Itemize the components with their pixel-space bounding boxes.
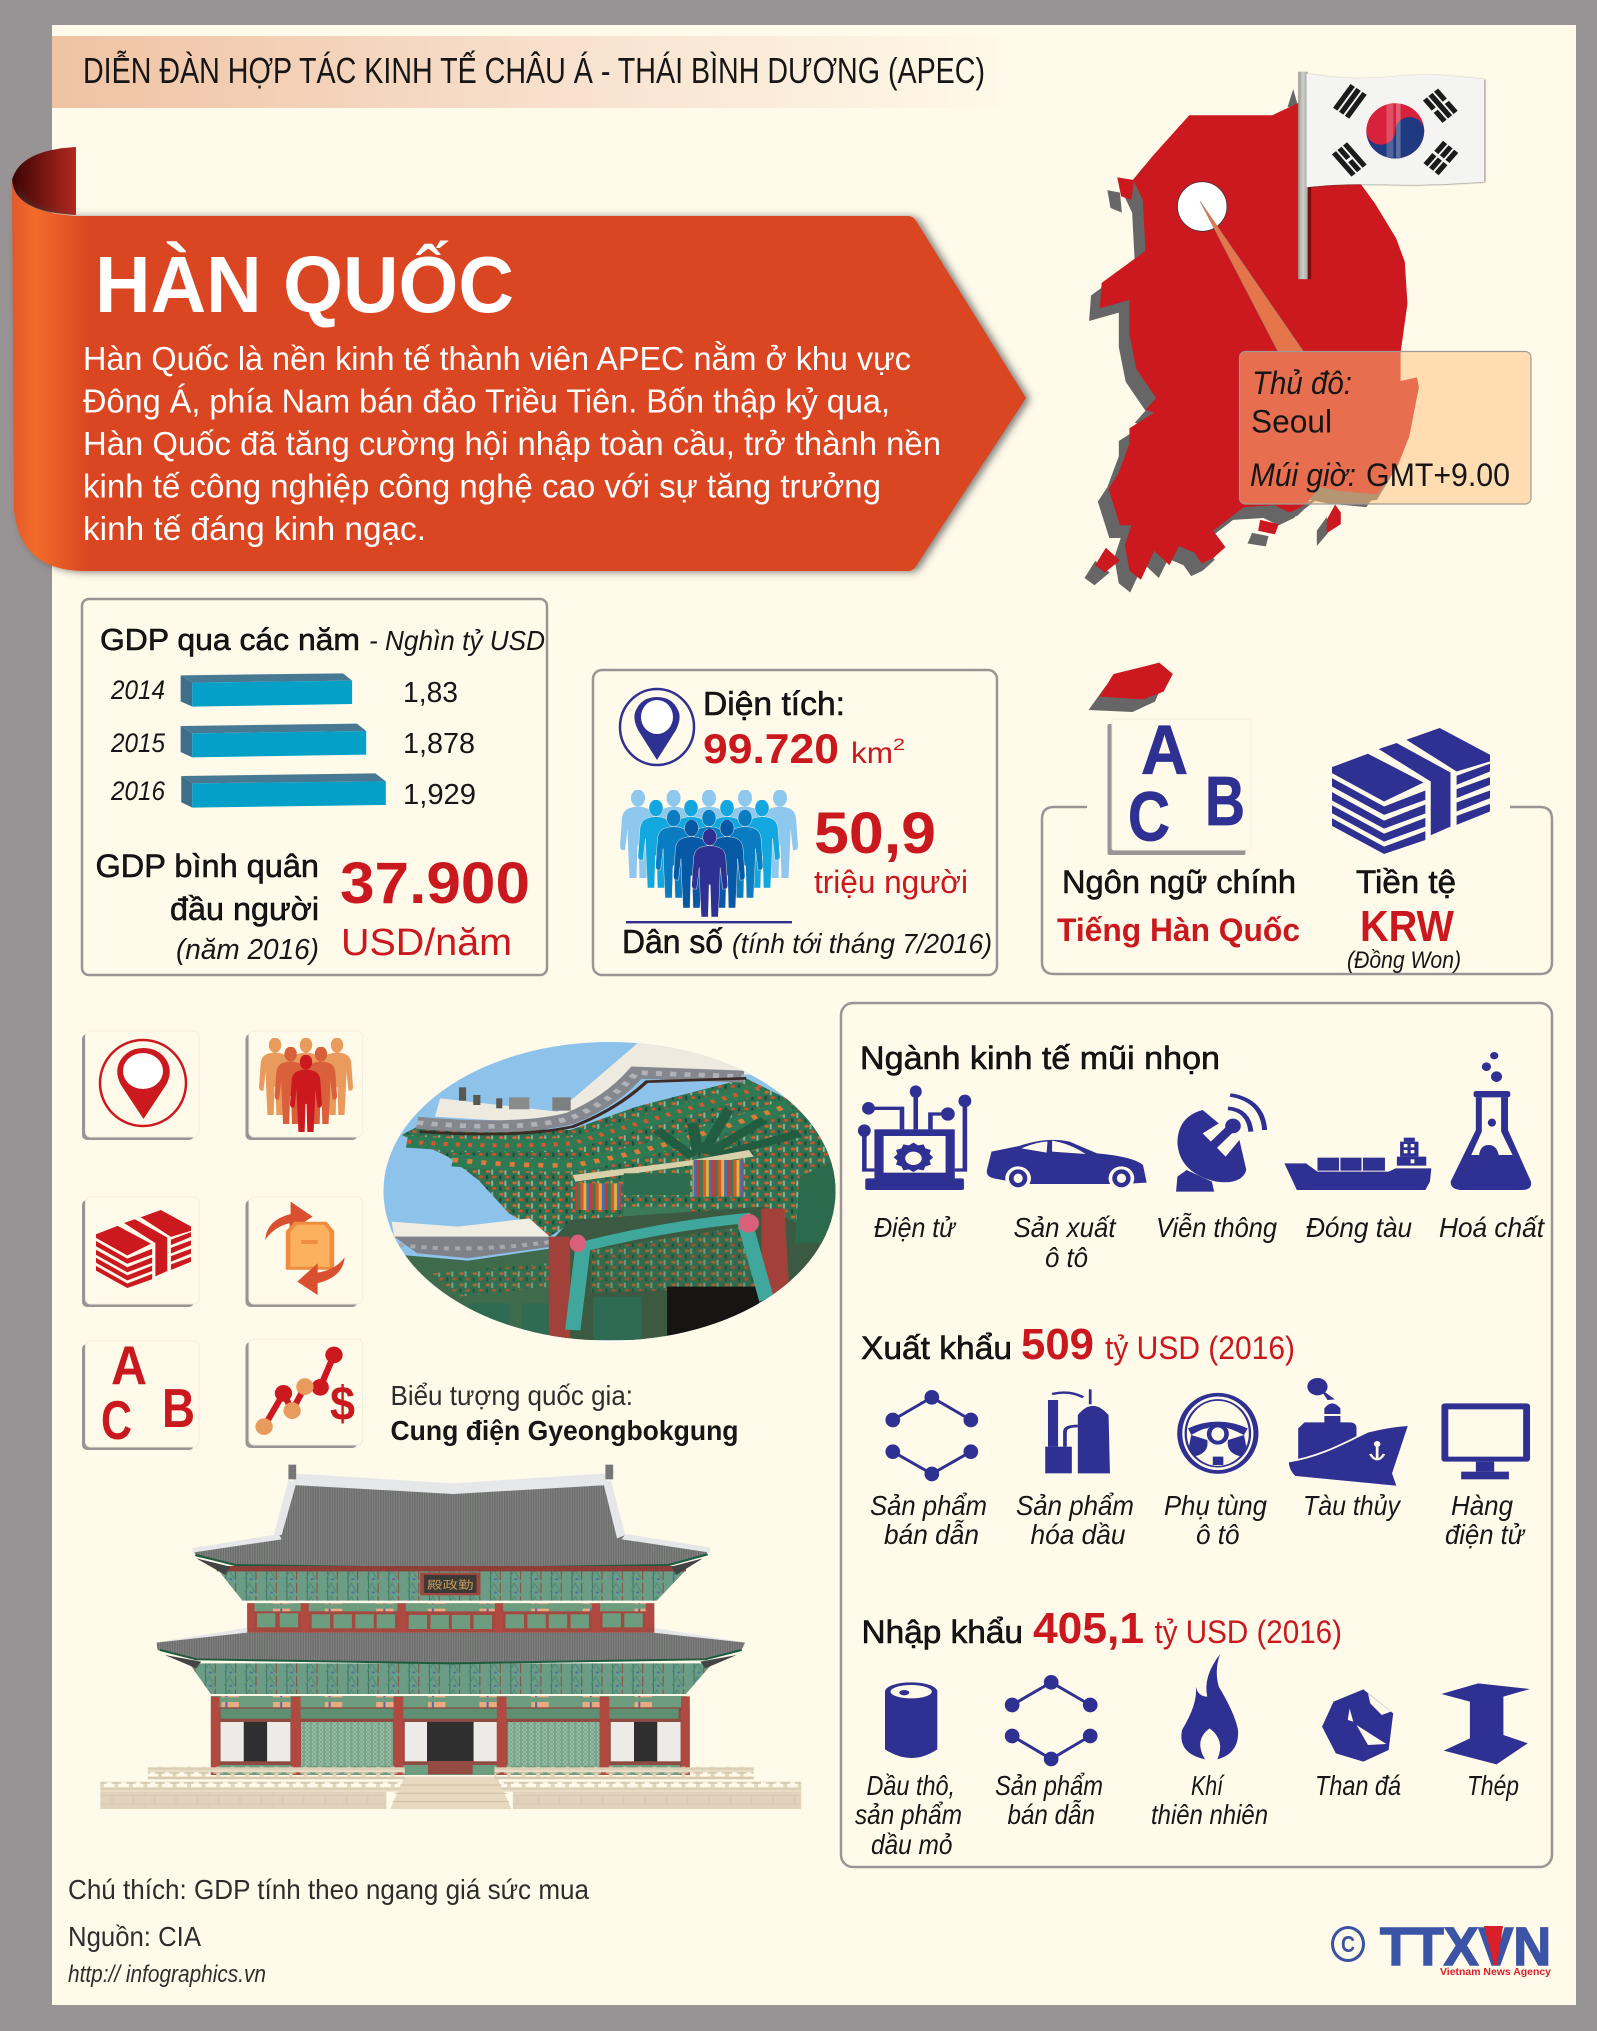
- icon: ABC card: A: [1141, 711, 1188, 789]
- GDP per capita label: [96, 848, 319, 966]
- population label: (tính tới tháng 7/2016): [732, 928, 992, 959]
- icon: oil barrel: [885, 1682, 937, 1758]
- ground floor walls: [211, 1707, 690, 1775]
- GDP per capita label: đầu người: [170, 891, 319, 927]
- currency text: (Đồng Won): [1347, 947, 1461, 974]
- currency text: Tiền tệ: [1356, 864, 1456, 900]
- import icons: [885, 1654, 1530, 1766]
- key sector labels: Sản xuất: [1014, 1212, 1117, 1243]
- export labels: [870, 1490, 1526, 1550]
- icon: petrochemical plant: [1045, 1389, 1110, 1473]
- name plaque: 殿政勤: [427, 1579, 474, 1591]
- lower roof: [157, 1628, 745, 1663]
- stone terrace: [100, 1792, 386, 1809]
- heading: imports: Nhập khẩu: [862, 1614, 1023, 1650]
- GDP per capita value: [340, 851, 530, 964]
- export icons: [885, 1378, 1530, 1487]
- GDP per capita value: 37.900: [340, 851, 530, 916]
- bar chart: GDP by year: 1,83: [403, 677, 458, 709]
- icon: semiconductor: [1005, 1675, 1098, 1766]
- population value: [814, 801, 968, 900]
- icon: semiconductor: [885, 1390, 978, 1481]
- key sector labels: [874, 1212, 1545, 1273]
- header band: [52, 36, 1022, 108]
- GDP per capita value: USD/năm: [341, 922, 512, 964]
- map islands: [1095, 177, 1341, 573]
- card: alphabet: A: [111, 1334, 147, 1396]
- import labels: Dầu thô,: [866, 1770, 955, 1801]
- flag of South Korea: [1298, 72, 1484, 279]
- key sector labels: Đóng tàu: [1306, 1212, 1412, 1243]
- icon: ABC card: C: [1128, 778, 1170, 856]
- icon: monitor: [1441, 1403, 1530, 1479]
- key sector icons: [858, 1052, 1531, 1192]
- bar chart: GDP by year: 2016: [110, 776, 166, 806]
- card: economy trend: $: [330, 1378, 355, 1431]
- icon: ABC card: [1108, 711, 1251, 856]
- photo caption: Biểu tượng quốc gia:: [390, 1380, 633, 1411]
- card: alphabet: B: [162, 1377, 195, 1439]
- icon: crowd of people: [620, 789, 798, 923]
- ribbon banner: [12, 147, 1026, 571]
- icon: car: [987, 1140, 1147, 1190]
- icon: ABC card: B: [1205, 762, 1245, 840]
- bar chart: GDP by year: 1,878: [403, 728, 475, 760]
- key sector labels: Điện tử: [874, 1212, 957, 1243]
- card: money: [82, 1197, 199, 1307]
- balustrades: [148, 1767, 405, 1777]
- icon: banknote stack: [1332, 728, 1490, 854]
- title: forum name: DIỄN ĐÀN HỢP TÁC KINH TẾ CHÂU Á - THÁI BÌNH DƯƠNG (APEC): [83, 49, 985, 91]
- key sector labels: ô tô: [1045, 1242, 1088, 1273]
- icon: coal: [1322, 1689, 1393, 1762]
- export labels: Sản phẩm: [870, 1490, 987, 1521]
- heading: exports: [861, 1320, 1295, 1369]
- map of South Korea with flag: [1085, 72, 1484, 593]
- icon: ship: [1288, 1378, 1409, 1487]
- upper bracket set: [218, 1570, 686, 1601]
- footnote and sources: http:// infographics.vn: [68, 1961, 266, 1988]
- card: alphabet: [82, 1334, 199, 1451]
- import labels: bán dẫn: [1008, 1799, 1095, 1830]
- bar chart: GDP by year: [110, 673, 476, 811]
- language text: Ngôn ngữ chính: [1062, 864, 1296, 900]
- import labels: Khí: [1191, 1770, 1225, 1801]
- GDP heading: - Nghìn tỷ USD: [369, 625, 545, 656]
- icon: steel beam: [1441, 1683, 1530, 1764]
- population label: Dân số: [622, 923, 723, 960]
- heading: imports: [862, 1604, 1342, 1653]
- area text: [703, 685, 905, 772]
- GDP heading: [100, 622, 545, 657]
- card: alphabet: C: [101, 1389, 132, 1451]
- intro paragraph: Đông Á, phía Nam bán đảo Triều Tiên. Bốn thập kỷ qua,: [83, 382, 890, 420]
- icon: gas flame: [1181, 1654, 1238, 1759]
- callout: capital and time zone: Seoul: [1251, 404, 1332, 440]
- icon: steering wheel: [1180, 1395, 1256, 1472]
- import labels: dầu mỏ: [871, 1829, 952, 1860]
- card: people: [246, 1031, 362, 1140]
- name plaque: [420, 1573, 480, 1595]
- population value: triệu người: [814, 864, 968, 900]
- export labels: Hàng: [1451, 1490, 1513, 1521]
- illustration: Geunjeongjeon palace hall: [100, 1465, 801, 1809]
- callout pointer: [1200, 201, 1303, 352]
- upper roof: [192, 1485, 710, 1568]
- icon: cargo ship: [1284, 1138, 1431, 1190]
- export labels: điện tử: [1445, 1519, 1526, 1550]
- GDP per capita label: (năm 2016): [176, 934, 319, 966]
- logo: TTXVN: C: [1341, 1931, 1355, 1957]
- currency text: KRW: [1360, 902, 1454, 951]
- logo: TTXVN: Vietnam News Agency: [1440, 1966, 1551, 1978]
- footnote and sources: [68, 1874, 589, 1988]
- heading: imports: tỷ USD (2016): [1154, 1614, 1342, 1650]
- area text: 2: [893, 735, 905, 754]
- lower bracket set: [189, 1663, 713, 1694]
- card: economy trend: [246, 1339, 362, 1448]
- import labels: Sản phẩm: [995, 1770, 1103, 1801]
- import labels: thiên nhiên: [1151, 1799, 1268, 1830]
- callout: capital and time zone: GMT+9.00: [1366, 457, 1510, 493]
- footnote and sources: Chú thích: GDP tính theo ngang giá sức mua: [68, 1874, 589, 1905]
- heading: imports: 405,1: [1033, 1604, 1144, 1653]
- key sector labels: Hoá chất: [1439, 1212, 1545, 1243]
- export labels: Sản phẩm: [1016, 1490, 1134, 1521]
- population value: 50,9: [814, 801, 936, 866]
- import labels: Thép: [1467, 1770, 1519, 1801]
- import labels: Than đá: [1315, 1770, 1401, 1801]
- callout: capital and time zone: Múi giờ:: [1250, 457, 1356, 493]
- export labels: bán dẫn: [884, 1519, 979, 1550]
- import labels: [855, 1770, 1519, 1860]
- heading: exports: tỷ USD (2016): [1105, 1330, 1295, 1366]
- heading: country: HÀN QUỐC: [95, 240, 514, 329]
- bar chart: GDP by year: 2014: [110, 675, 165, 705]
- area text: km: [851, 737, 893, 770]
- callout: capital and time zone: Thủ đô:: [1252, 365, 1352, 401]
- intro paragraph: Hàn Quốc đã tăng cường hội nhập toàn cầu, trở thành nền: [83, 425, 941, 462]
- intro paragraph: Hàn Quốc là nền kinh tế thành viên APEC nằm ở khu vực: [83, 340, 911, 377]
- card: location: [82, 1031, 199, 1140]
- icon grid: red category cards: [82, 1031, 362, 1451]
- photo caption: [390, 1380, 738, 1446]
- panel: GDP: [82, 599, 547, 975]
- GDP heading: GDP qua các năm: [100, 622, 360, 657]
- language text: [1057, 864, 1300, 948]
- upper floor: [247, 1603, 654, 1633]
- intro paragraph: [83, 340, 941, 547]
- heading: exports: 509: [1021, 1320, 1094, 1369]
- currency text: [1347, 864, 1461, 974]
- icon: electronics: [858, 1085, 971, 1190]
- icon: flask: [1451, 1052, 1531, 1190]
- photo caption: Cung điện Gyeongbokgung: [390, 1415, 738, 1446]
- capital marker: [1177, 182, 1227, 231]
- card: trade box: [246, 1197, 362, 1307]
- bar chart: GDP by year: 1,929: [403, 779, 476, 811]
- export labels: Tàu thủy: [1303, 1490, 1402, 1521]
- heading: exports: Xuất khẩu: [861, 1330, 1012, 1366]
- export labels: Phụ tùng: [1164, 1490, 1267, 1521]
- map mainland: [1100, 102, 1419, 580]
- icon: location pin: [620, 689, 694, 765]
- GDP per capita label: GDP bình quân: [96, 848, 319, 884]
- intro paragraph: kinh tế đáng kinh ngạc.: [83, 510, 426, 547]
- area text: Diện tích:: [703, 685, 845, 722]
- area text: 99.720: [703, 725, 839, 772]
- icon: satellite dish: [1176, 1095, 1265, 1192]
- panel: area and population: [593, 670, 997, 975]
- panel: key sectors, exports, imports: [841, 1003, 1552, 1867]
- export labels: ô tô: [1196, 1519, 1240, 1550]
- footnote and sources: Nguồn: CIA: [68, 1921, 201, 1952]
- callout: capital and time zone: [1240, 352, 1531, 504]
- bar chart: GDP by year: 2015: [110, 728, 166, 758]
- map shadow: [1085, 89, 1408, 593]
- intro paragraph: kinh tế công nghiệp công nghệ cao với sự tăng trưởng: [83, 468, 881, 504]
- key sector labels: Viễn thông: [1156, 1212, 1277, 1243]
- icon: small island: [1089, 663, 1173, 712]
- panel: language and currency: [1042, 663, 1552, 974]
- heading: key sectors: Ngành kinh tế mũi nhọn: [860, 1040, 1220, 1076]
- population label: [622, 923, 992, 960]
- export labels: hóa dầu: [1030, 1519, 1126, 1550]
- logo: TTXVN: TTXVN: [1380, 1917, 1551, 1977]
- import labels: sản phẩm: [855, 1799, 962, 1830]
- language text: Tiếng Hàn Quốc: [1057, 912, 1300, 948]
- photo: palace roof detail: [376, 1040, 846, 1343]
